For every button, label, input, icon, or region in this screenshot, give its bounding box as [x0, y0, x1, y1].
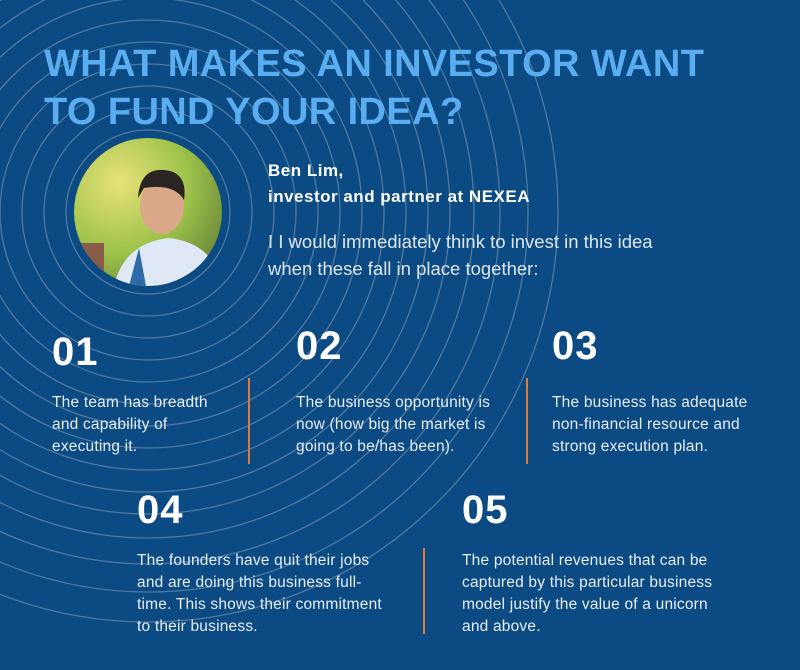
item 01: The team has breadth and capability of executing it. [52, 394, 208, 455]
item 05 [462, 488, 712, 635]
speaker name: Ben Lim, [268, 161, 344, 180]
title: WHAT MAKES AN INVESTOR WANT [44, 43, 704, 85]
photo: Ben Lim [74, 138, 222, 286]
item 01 [52, 330, 208, 455]
item 04 [137, 488, 382, 635]
item 04: 04 [137, 488, 184, 532]
item 03 [552, 324, 747, 455]
item 03: The business has adequate non-financial resource and strong execution plan. [552, 394, 747, 455]
title [44, 43, 704, 133]
item 02 [296, 324, 490, 455]
speaker name: investor and partner at NEXEA [268, 187, 530, 206]
quote: I I would immediately think to invest in this idea [268, 231, 653, 252]
item 05: 05 [462, 488, 508, 532]
quote [268, 231, 653, 279]
item 04: The founders have quit their jobs and are doing this business full-time. This shows their commitment to their business. [137, 552, 382, 635]
item 05: The potential revenues that can be captured by this particular business model justify the value of a unicorn and above. [462, 552, 712, 635]
speaker name [268, 161, 530, 206]
item 02: The business opportunity is now (how big the market is going to be/has been). [296, 394, 490, 455]
item 02: 02 [296, 324, 342, 368]
item 03: 03 [552, 324, 598, 368]
item 01: 01 [52, 330, 98, 374]
title: TO FUND YOUR IDEA? [44, 91, 464, 133]
quote: when these fall in place together: [268, 258, 538, 279]
